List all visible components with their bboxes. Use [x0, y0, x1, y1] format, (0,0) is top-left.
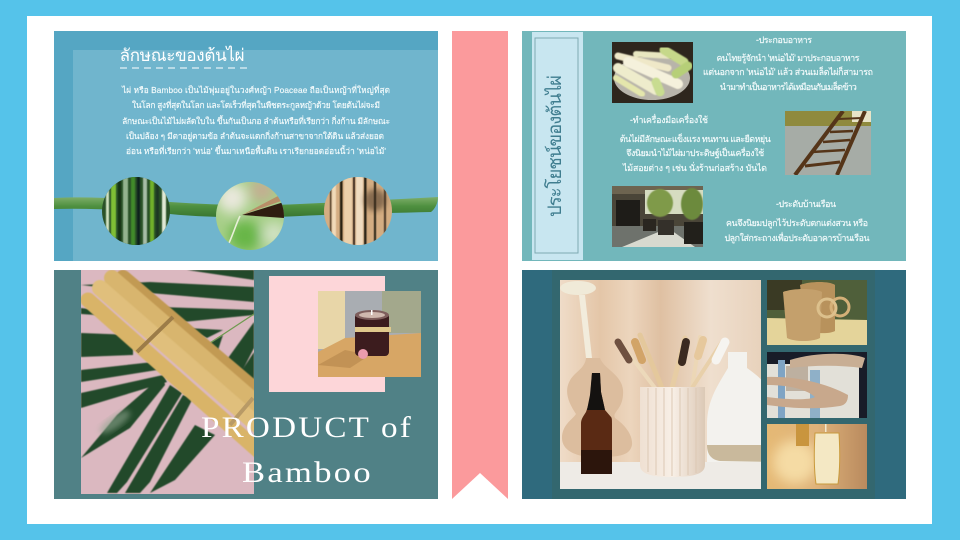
- pink square: [269, 276, 385, 392]
- text: tools: จึงนิยมนำไม้ไผ่มาประดิษฐ์เป็นเครื่องใช้: [626, 147, 764, 159]
- body text: description: ในโลก สูงที่สุดในโลก และโตเร็วที่สุดในพืชตระกูลหญ้าด้วย โดยต้นไผ่จะมี: [132, 99, 380, 111]
- body text: description: ลักษณะเป็นไม้ไม่ผลัดใบใน ขึ้นกันเป็นกอ ลำต้นหรือที่เรียกว่า กิ่งก้าน มีลักษณะ: [122, 115, 390, 126]
- photo: bamboo toothbrushes: [560, 280, 772, 489]
- photo: bamboo ladder: [785, 111, 871, 175]
- twine: [137, 317, 173, 352]
- panel: benefits of bamboo: [522, 31, 906, 261]
- photo: bamboo shoots: [612, 42, 693, 103]
- panel: product of bamboo: [54, 270, 438, 499]
- text: decoration: -ประดับบ้านเรือน: [776, 199, 836, 209]
- text: cooking: นำมาทำเป็นอาหารได้เหมือนกับเมล็ดข้าว: [720, 81, 857, 92]
- text: tools: ต้นไผ่มีลักษณะแข็งแรง ทนทาน และยืดหยุ่น: [620, 133, 771, 145]
- text: cooking: -ประกอบอาหาร: [756, 35, 812, 45]
- text: decoration: ปลูกใส่กระถางเพื่อประดับอาคารบ้านเรือน: [724, 232, 870, 244]
- photo circle: bamboo grove: [102, 177, 170, 245]
- body text: description: [121, 84, 390, 156]
- body text: description: ไผ่ หรือ Bamboo เป็นไม้พุ่มอยู่ในวงศ์หญ้า Poaceae ถือเป็นหญ้าที่ใหญ่ที่สุด: [121, 84, 390, 96]
- body text: description: อ่อน หรือที่เรียกว่า 'หน่อ' ขึ้นมาเหนือพื้นดิน เราเรียกยอดอ่อนนี้ว่า 'หน่อไม้': [126, 145, 386, 156]
- photo: bamboo hangers: [767, 352, 867, 418]
- dropper bottle: [581, 374, 612, 450]
- sidebar heading: ประโยชน์ของต้นไผ่: [544, 75, 565, 217]
- photo circle: bamboo water spout: [216, 182, 284, 250]
- photo circle: bamboo fence: [324, 177, 392, 245]
- photo: bamboo lamp: [767, 424, 867, 489]
- body text: description: เป็นปล้อง ๆ มีตาอยู่ตามข้อ ลำต้นจะแตกกิ่งก้านสาขาจากใต้ดิน แล้วส่งยอด: [126, 130, 384, 142]
- photo: bamboo candle: [318, 291, 421, 377]
- cup: [640, 387, 705, 477]
- bamboo stem: [54, 197, 438, 217]
- text: decoration: [724, 199, 870, 244]
- text: tools: -ทำเครื่องมือเครื่องใช้: [630, 114, 708, 125]
- photo: bamboo straws on palm leaves: [81, 270, 262, 494]
- title: PRODUCT of Bamboo: [201, 411, 413, 489]
- title: PRODUCT of Bamboo: PRODUCT of: [201, 411, 413, 444]
- ribbon divider: [452, 31, 508, 499]
- photo: bamboo garden courtyard: [612, 186, 703, 247]
- heading: characteristics: ลักษณะของต้นไผ่: [120, 45, 245, 65]
- panel: characteristics of bamboo: [54, 31, 438, 261]
- sidebar title plate: [532, 32, 583, 260]
- text: tools: ไม้สอยต่าง ๆ เช่น นั่งร้านก่อสร้าง บันได: [622, 162, 767, 173]
- bamboo straws: [88, 278, 262, 454]
- title: PRODUCT of Bamboo: Bamboo: [242, 456, 373, 489]
- text: cooking: คนไทยรู้จักนำ 'หน่อไม้' มาประกอบอาหาร: [716, 53, 860, 64]
- text: decoration: คนจึงนิยมปลูกไว้ประดับตกแต่งสวน หรือ: [726, 218, 868, 229]
- brushes: [618, 335, 725, 388]
- text: tools: [620, 114, 771, 173]
- vase: [562, 358, 632, 457]
- text: cooking: [703, 35, 873, 92]
- text: cooking: แต่นอกจาก 'หน่อไม้' แล้ว ส่วนเมล็ดไผ่ก็สามารถ: [703, 66, 873, 77]
- heading dashed underline: [120, 67, 251, 69]
- panel: bamboo product photos: [522, 270, 906, 499]
- white jug: [707, 352, 761, 462]
- photo: bamboo mugs: [767, 280, 867, 345]
